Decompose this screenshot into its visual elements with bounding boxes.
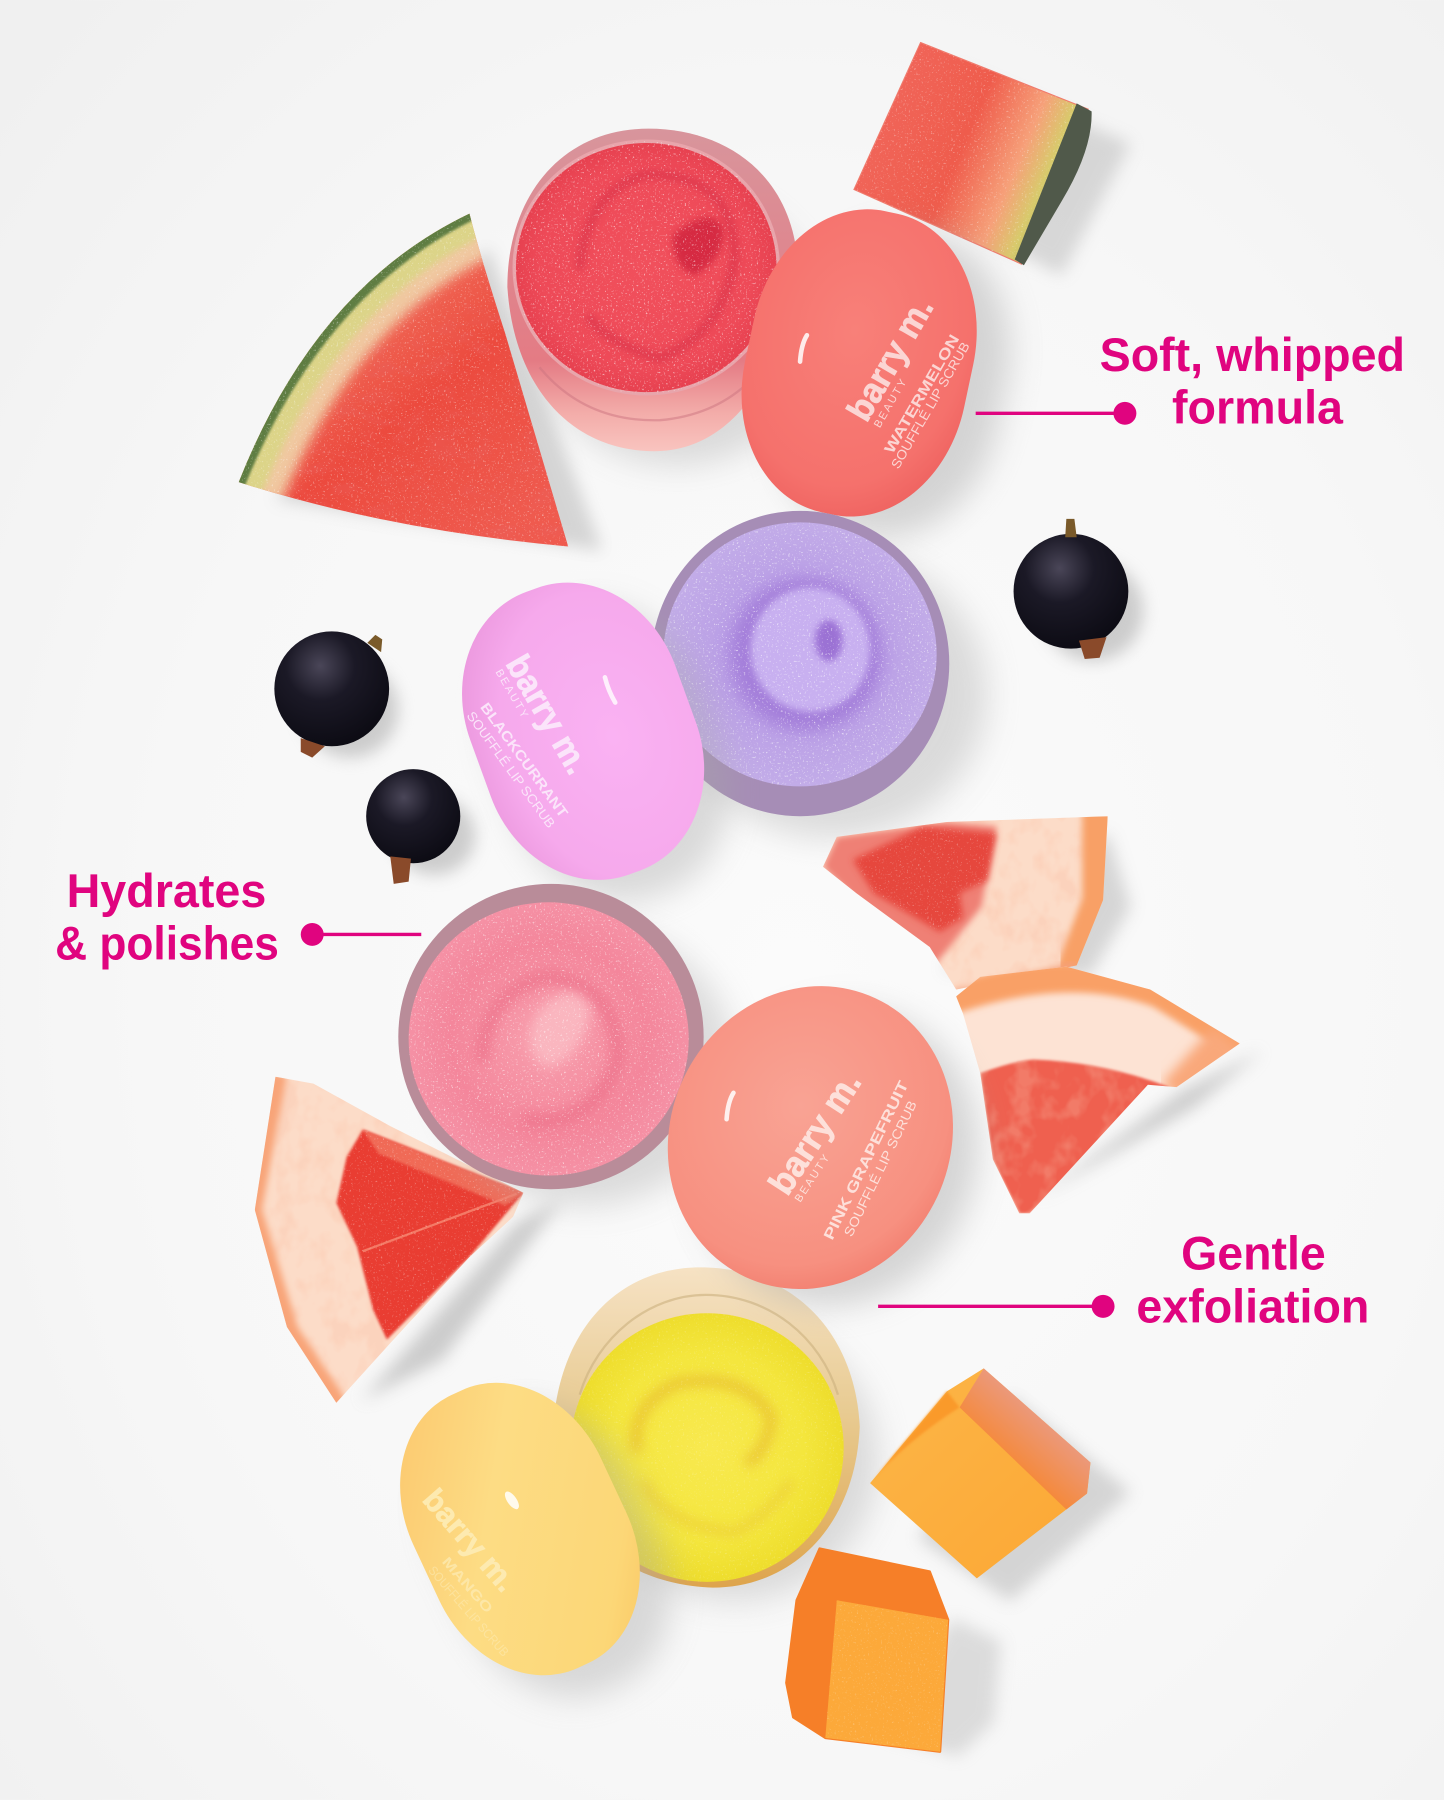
callout text: Gentle xyxy=(1181,1227,1326,1280)
lid branding: barry m. xyxy=(498,649,596,781)
callout: gentle exfoliation xyxy=(878,1227,1369,1332)
pink grapefruit lid xyxy=(618,939,1027,1353)
callout leader xyxy=(976,412,1125,415)
pink jar with grapefruit scrub xyxy=(398,884,735,1205)
grapefruit wedge left xyxy=(250,1073,562,1410)
watermelon lid xyxy=(718,189,1034,557)
lid product name: SOUFFLÉ LIP SCRUB xyxy=(841,1098,920,1239)
callout leader xyxy=(312,933,421,936)
callout: hydrates and polishes: & polishes xyxy=(55,917,279,970)
mango chunk lower xyxy=(786,1549,1001,1756)
callout: soft, whipped formula: formula xyxy=(1172,381,1344,434)
lid highlight xyxy=(605,677,615,703)
wedge pith xyxy=(255,1077,523,1403)
berry xyxy=(1014,534,1128,649)
jar body xyxy=(507,129,798,451)
lid shell xyxy=(429,553,737,910)
lid branding: SOUFFLÉ LIP SCRUB xyxy=(425,1563,512,1659)
wedge rind and flesh xyxy=(250,1073,523,1410)
pink blackcurrant lid xyxy=(429,553,762,932)
red jar with watermelon scrub xyxy=(507,129,821,465)
lid product name: SOUFFLÉ LIP SCRUB xyxy=(464,709,558,831)
lid branding: WATERMELON xyxy=(881,332,963,457)
lid branding: barry m. xyxy=(761,1064,869,1202)
purple jar with blackcurrant scrub xyxy=(651,511,987,838)
lid branding: BEAUTY xyxy=(493,667,531,722)
jar body xyxy=(553,1267,860,1588)
chunk skin xyxy=(786,1549,948,1752)
lid shell xyxy=(363,1349,677,1709)
lid product name: PINK GRAPEFRUIT xyxy=(821,1078,912,1243)
lid branding xyxy=(388,1482,555,1659)
scrub surface xyxy=(570,1313,844,1582)
lid highlight xyxy=(727,1093,733,1119)
jar rim xyxy=(398,884,704,1189)
chunk flesh xyxy=(825,1600,948,1752)
yellow mango lid xyxy=(363,1349,708,1731)
callout: hydrates and polishes xyxy=(55,864,421,970)
lid highlight xyxy=(800,335,807,362)
lid shell xyxy=(718,189,1001,537)
chunk flesh xyxy=(870,1368,1090,1578)
chunk skin xyxy=(960,1368,1090,1510)
lid highlight xyxy=(502,1489,522,1511)
yellow jar with mango scrub xyxy=(553,1267,878,1600)
blackcurrant small xyxy=(366,769,475,884)
watermelon chunk xyxy=(854,43,1131,276)
wedge rind and flesh xyxy=(823,804,1100,999)
scrub surface xyxy=(514,141,778,394)
lid branding: SOUFFLÉ LIP SCRUB xyxy=(888,339,973,471)
scrub surface xyxy=(409,902,689,1175)
lid shell xyxy=(618,939,1002,1336)
berry xyxy=(366,769,460,863)
mango chunk upper xyxy=(870,1368,1131,1601)
wedge rind and flesh xyxy=(947,978,1251,1213)
lid branding: MANGO xyxy=(439,1554,496,1616)
blackcurrant left xyxy=(274,631,398,758)
scrub swirl xyxy=(730,579,882,730)
grapefruit wedge upper xyxy=(823,816,1134,990)
chunk flesh xyxy=(854,43,1088,264)
lid branding: BEAUTY xyxy=(872,376,910,430)
callout: soft, whipped formula xyxy=(976,328,1405,434)
lid branding: BEAUTY xyxy=(793,1151,833,1205)
callout leader xyxy=(878,1305,1103,1308)
callout text: Hydrates xyxy=(67,864,266,917)
watermelon wedge xyxy=(235,211,603,551)
chunk rind xyxy=(1015,103,1092,265)
lid branding: barry m. xyxy=(839,290,941,428)
scrub swirl xyxy=(580,174,735,358)
scrub swirl xyxy=(636,1381,771,1464)
lid branding xyxy=(827,290,981,471)
lid product name xyxy=(821,1078,926,1249)
wedge rind xyxy=(235,211,473,488)
blackcurrant right xyxy=(1014,519,1143,661)
lid branding: barry m. xyxy=(416,1482,524,1598)
grapefruit wedge right xyxy=(947,967,1263,1213)
wedge pith xyxy=(823,816,1108,990)
wedge pith xyxy=(956,967,1240,1213)
callout text: Soft, whipped xyxy=(1100,328,1405,381)
scrub surface xyxy=(663,522,937,786)
wedge flesh xyxy=(239,214,568,546)
jar rim xyxy=(651,511,949,816)
callout: gentle exfoliation: exfoliation xyxy=(1136,1279,1369,1332)
berry xyxy=(274,631,389,746)
lid product name: BLACKCURRANT xyxy=(477,700,571,821)
scrub swirl xyxy=(482,976,618,1121)
